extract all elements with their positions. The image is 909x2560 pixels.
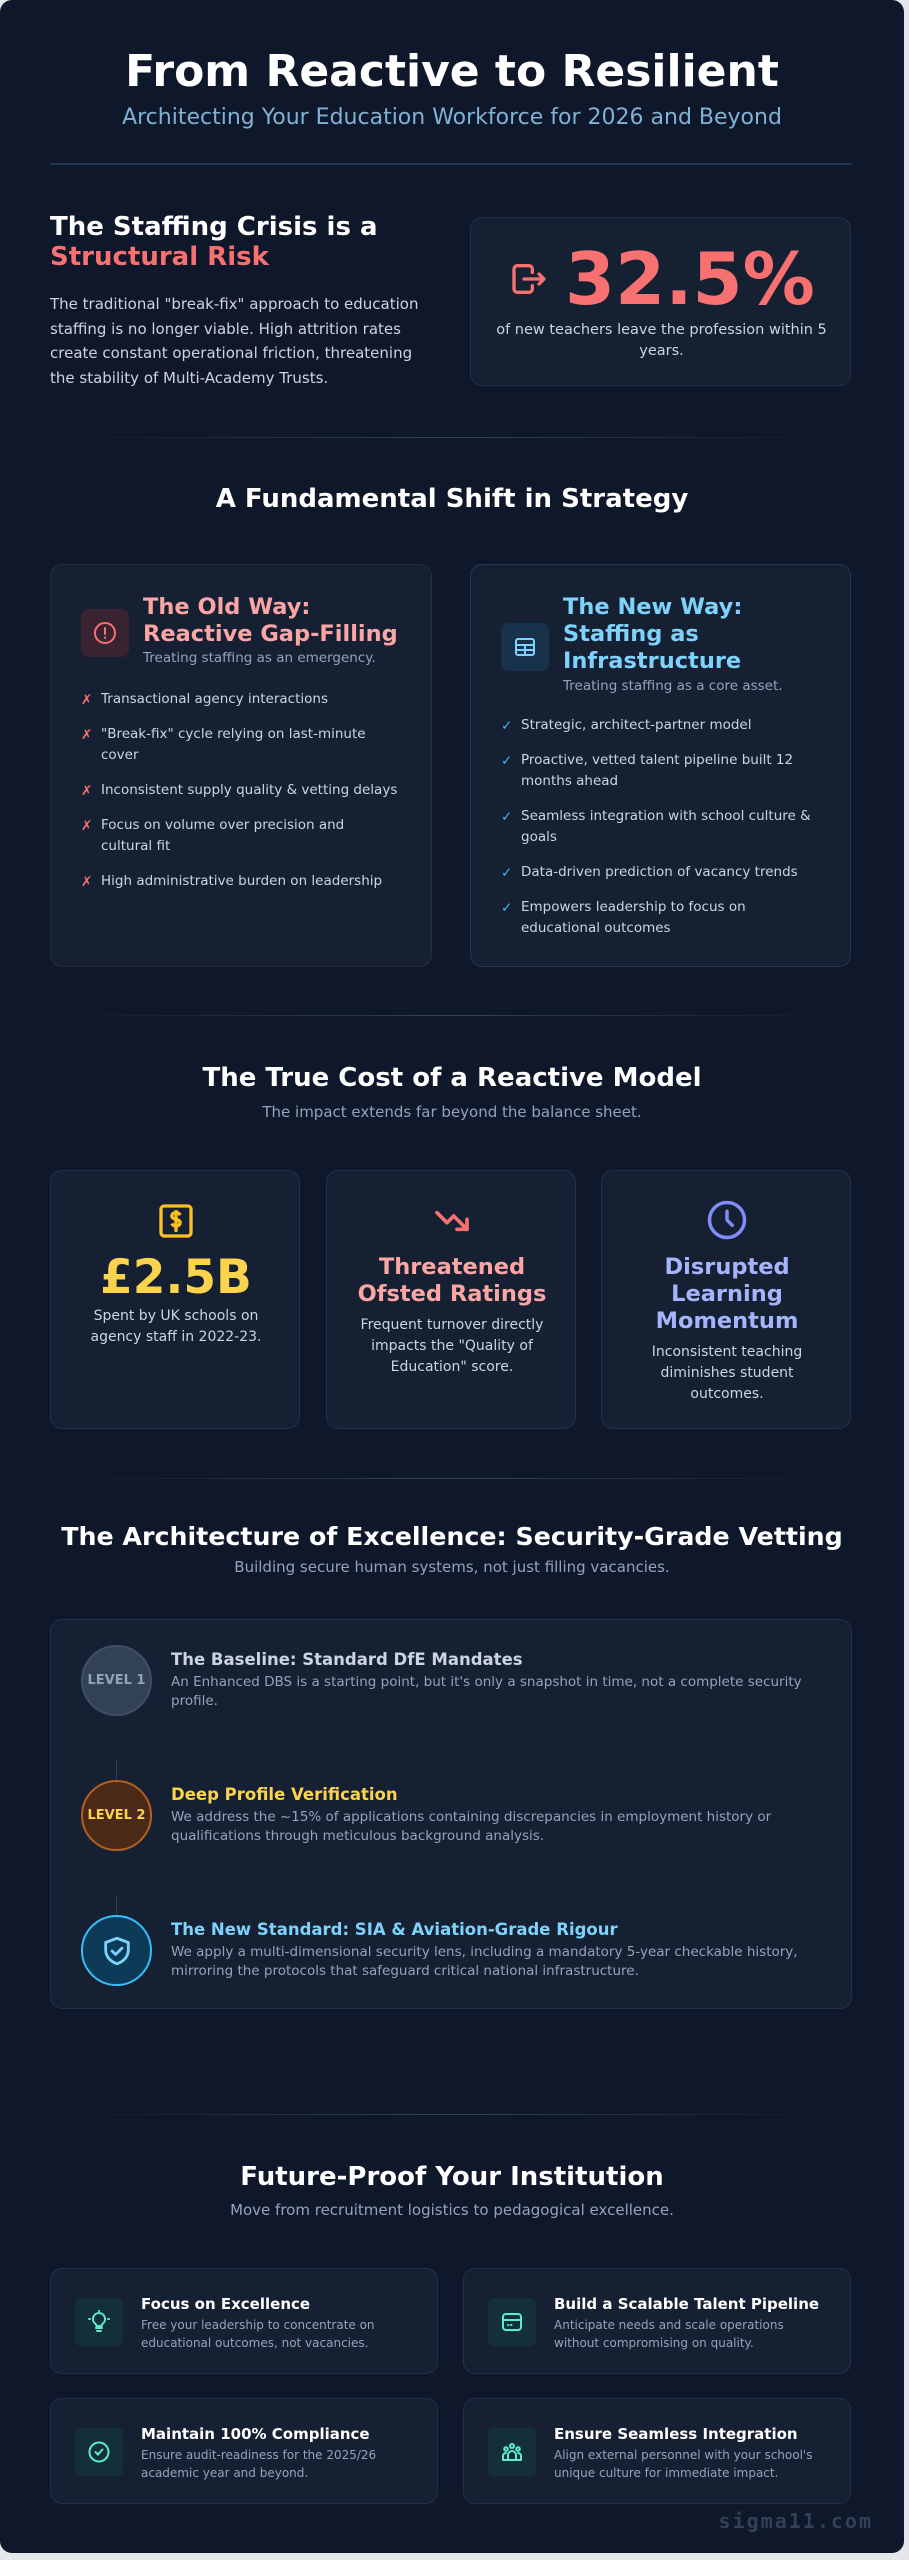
list: old way: ✗ — [81, 727, 92, 743]
card: £2.5B — [50, 1170, 300, 1429]
level 2: LEVEL 2 — [88, 1808, 145, 1823]
icon: table — [501, 623, 549, 671]
list: new way: Proactive, vetted talent pipeline built 12 months ahead — [521, 752, 793, 789]
level 1: LEVEL 1 — [88, 1673, 145, 1688]
level 1: The Baseline: Standard DfE Mandates — [171, 1650, 523, 1669]
card: compliance: Ensure audit-readiness for the 2025/26 academic year and beyond. — [141, 2448, 376, 2480]
icon: clock — [708, 1200, 746, 1240]
list: new way: Empowers leadership to focus on educational outcomes — [521, 899, 746, 936]
list: old way: ✗ — [81, 692, 92, 708]
card: talent pipeline: Build a Scalable Talent Pipeline — [554, 2295, 819, 2313]
list: old way: ✗ — [81, 874, 92, 890]
stat card: 32.5% — [470, 217, 851, 386]
icon: dollar — [159, 1204, 193, 1238]
icon: alert — [81, 609, 129, 657]
list: old way: Focus on volume over precision and cultural fit — [101, 817, 344, 854]
icon: trend down — [435, 1210, 469, 1232]
list: new way: Seamless integration with school culture & goals — [521, 808, 811, 845]
heading: old way: The Old Way: — [143, 594, 310, 620]
list: new way: ✓ — [501, 753, 512, 769]
heading: new way: Staffing as — [563, 621, 699, 647]
card: integration: Align external personnel with your school's unique culture for immediate impact. — [554, 2448, 812, 2480]
panel: new way: Treating staffing as a core asset. — [563, 678, 783, 694]
list: old way: "Break-fix" cycle relying on last-minute cover — [101, 726, 366, 763]
level 3 — [81, 1915, 798, 1986]
card: talent pipeline: Anticipate needs and scale operations without compromising on quality. — [554, 2318, 784, 2350]
big number: 32.5% — [565, 237, 815, 321]
heading: Threatened — [379, 1254, 525, 1280]
heading: Disrupted — [664, 1254, 790, 1280]
heading: old way — [143, 594, 398, 647]
level 1: An Enhanced DBS is a starting point, but it's only a snapshot in time, not a complete security profile. — [171, 1674, 802, 1709]
list: new way: ✓ — [501, 865, 512, 881]
list: new way: ✓ — [501, 718, 512, 734]
card: integration — [463, 2398, 851, 2504]
section: staffing crisis — [50, 212, 418, 386]
level 2: We address the ~15% of applications containing discrepancies in employment history or qualifications through meticulous background analysis. — [171, 1809, 771, 1844]
footer: brand: sigma11.com — [719, 2509, 873, 2533]
heading: new way: Infrastructure — [563, 648, 741, 674]
icon: exit — [512, 264, 546, 294]
heading: Learning — [671, 1281, 783, 1307]
heading — [656, 1254, 798, 1334]
text: The impact extends far beyond the balance sheet. — [262, 1103, 642, 1121]
paragraph: The traditional "break-fix" approach to education staffing is no longer viable. High attrition rates create constant operational friction, threatening the stability of Multi-Academy Trusts. — [50, 295, 418, 386]
card: talent pipeline — [463, 2268, 851, 2374]
subtitle: Architecting Your Education Workforce for 2026 and Beyond — [122, 105, 782, 130]
card: compliance: Maintain 100% Compliance — [141, 2425, 370, 2443]
heading — [358, 1254, 546, 1307]
panel: vetting levels — [50, 1619, 852, 2009]
panel: old way — [50, 564, 432, 967]
heading: true cost: The True Cost of a Reactive Model — [202, 1063, 702, 1093]
heading: staffing crisis — [50, 212, 378, 272]
level 1 — [81, 1645, 802, 1716]
list: old way: Transactional agency interactions — [101, 691, 328, 707]
card: disrupted learning: Inconsistent teaching diminishes student outcomes. — [652, 1344, 802, 1402]
panel: new way — [470, 564, 851, 967]
heading: Ofsted Ratings — [358, 1281, 546, 1307]
title: From Reactive to Resilient — [125, 46, 779, 97]
heading: new way: The New Way: — [563, 594, 742, 620]
list: new way: ✓ — [501, 900, 512, 916]
caption: of new teachers leave the profession within 5 years. — [496, 322, 827, 359]
heading: staffing crisis: Structural Risk — [50, 242, 269, 272]
level 3: We apply a multi-dimensional security lens, including a mandatory 5-year checkable history, mirroring the protocols that safeguard critical national infrastructure. — [171, 1944, 798, 1979]
heading: old way: Reactive Gap-Filling — [143, 621, 398, 647]
card: integration: Ensure Seamless Integration — [554, 2425, 798, 2443]
list: old way: Inconsistent supply quality & vetting delays — [101, 782, 397, 798]
heading: fundamental shift: A Fundamental Shift in Strategy — [216, 484, 688, 514]
level 2: Deep Profile Verification — [171, 1785, 398, 1804]
text: Move from recruitment logistics to pedagogical excellence. — [230, 2201, 674, 2219]
card: disrupted learning — [601, 1170, 851, 1429]
card: compliance — [50, 2398, 438, 2504]
card: focus on excellence: Focus on Excellence — [141, 2295, 310, 2313]
heading: new way — [563, 594, 742, 674]
card: focus on excellence — [50, 2268, 438, 2374]
list: old way: ✗ — [81, 818, 92, 834]
heading: future-proof: Future-Proof Your Institution — [240, 2162, 664, 2192]
list: old way — [81, 691, 397, 890]
heading: Momentum — [656, 1308, 798, 1334]
card: focus on excellence: Free your leadership to concentrate on educational outcomes, not vacancies. — [141, 2318, 375, 2350]
heading: architecture: The Architecture of Excellence: Security-Grade Vetting — [61, 1522, 843, 1551]
level 2 — [81, 1780, 772, 1851]
list: new way: ✓ — [501, 809, 512, 825]
card: Ofsted: Frequent turnover directly impacts the "Quality of Education" score. — [361, 1317, 543, 1375]
list: new way — [501, 717, 811, 936]
level 3: The New Standard: SIA & Aviation-Grade Rigour — [171, 1920, 618, 1939]
text: Building secure human systems, not just filling vacancies. — [234, 1558, 670, 1576]
list: old way: ✗ — [81, 783, 92, 799]
list: new way: Data-driven prediction of vacancy trends — [521, 864, 798, 880]
list: new way: Strategic, architect-partner model — [521, 717, 751, 733]
big number: £2.5B — [100, 1250, 252, 1305]
heading: staffing crisis: The Staffing Crisis is a — [50, 212, 378, 242]
list: old way: High administrative burden on leadership — [101, 873, 382, 889]
card: £2.5B: Spent by UK schools on agency staff in 2022-23. — [90, 1308, 262, 1345]
card: Ofsted — [326, 1170, 576, 1429]
panel: old way: Treating staffing as an emergency. — [143, 650, 376, 666]
